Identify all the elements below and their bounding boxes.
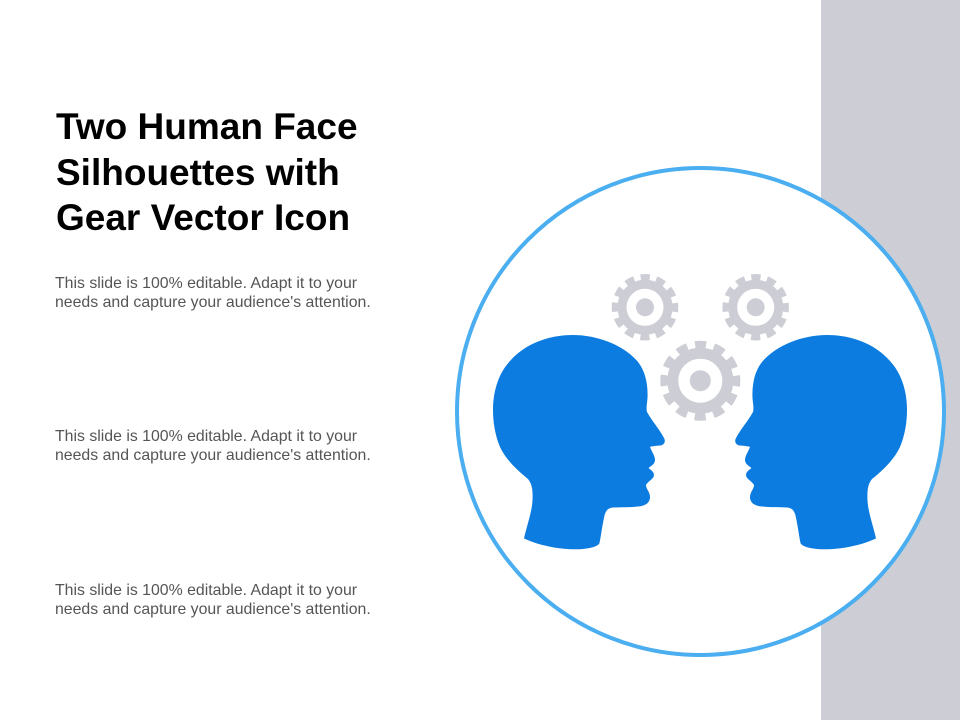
title <box>56 106 358 238</box>
title: Two Human Face <box>56 106 358 147</box>
panel: grey sidebar <box>821 0 960 720</box>
text block 1 <box>55 275 371 311</box>
text block 2: needs and capture your audience's attention. <box>55 447 371 464</box>
icon: left head silhouette <box>493 335 665 549</box>
text block 2 <box>55 428 371 464</box>
text block 3 <box>55 582 371 618</box>
text block 3: needs and capture your audience's attention. <box>55 601 371 618</box>
text block 1: This slide is 100% editable. Adapt it to your <box>55 275 357 292</box>
text block 3: This slide is 100% editable. Adapt it to your <box>55 582 357 599</box>
title: Silhouettes with <box>56 152 340 192</box>
icon: top left gear <box>616 278 674 337</box>
title: Gear Vector Icon <box>56 197 350 238</box>
icon: right head silhouette <box>735 335 907 549</box>
icon: top right gear <box>726 278 785 337</box>
icon: centre gear <box>665 345 736 416</box>
circle outline <box>457 168 944 655</box>
text block 1: needs and capture your audience's attention. <box>55 294 371 311</box>
text block 2: This slide is 100% editable. Adapt it to your <box>55 428 357 445</box>
